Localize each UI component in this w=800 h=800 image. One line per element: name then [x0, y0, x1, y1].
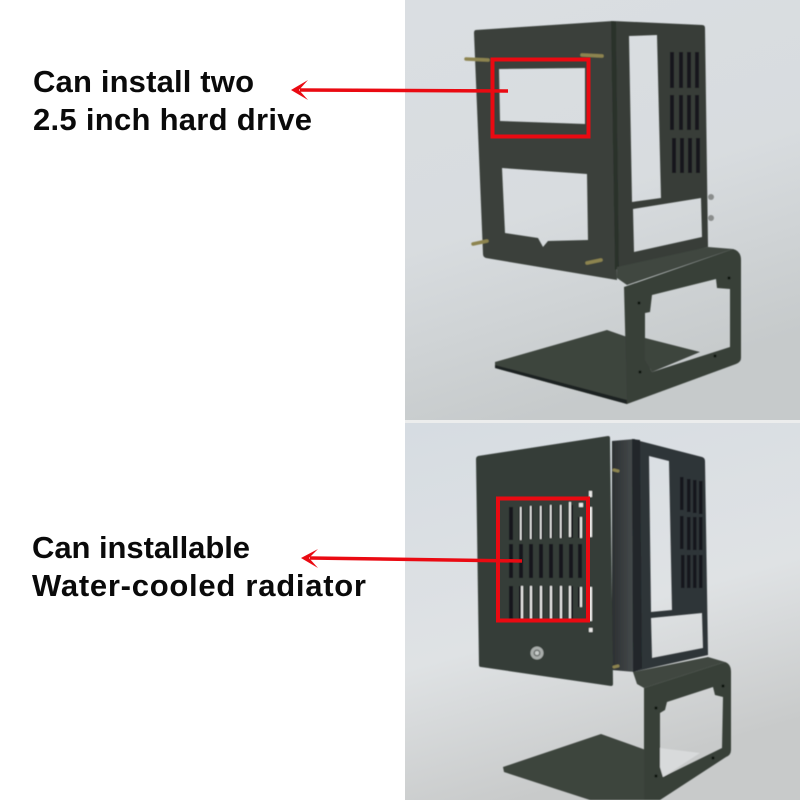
- standoffs between panel and frame: [614, 470, 618, 667]
- callout: hard drive: 2.5 inch hard drive: [33, 102, 312, 137]
- frame box: [612, 439, 708, 672]
- side panel: [476, 436, 613, 686]
- arrow: radiator: [301, 549, 522, 568]
- slots: bottom row: [509, 586, 582, 619]
- arrow: hard drive: [291, 80, 508, 100]
- vent slots, right face: [670, 52, 700, 173]
- red box: radiator area: [498, 498, 588, 620]
- slots: middle row: [509, 544, 582, 578]
- base plate: [503, 734, 660, 800]
- red box: hard drive area: [492, 60, 588, 136]
- PSU stand: [617, 247, 741, 404]
- vent slots, frame: [680, 477, 702, 588]
- callout: radiator: [32, 530, 366, 603]
- slots: top row: [509, 505, 582, 540]
- callout: radiator: Can installable: [32, 530, 250, 565]
- callout: hard drive: [33, 64, 312, 137]
- bolts on right side: [708, 194, 714, 221]
- photo: open-frame case, side panel view: [405, 420, 800, 800]
- standoffs: [466, 55, 602, 263]
- PSU stand: [633, 657, 731, 800]
- base plate: [495, 330, 650, 404]
- icon: power button: [530, 646, 544, 660]
- photo: open-frame case, front view: [405, 0, 800, 421]
- callout: radiator: Water-cooled radiator: [32, 568, 366, 603]
- right face: [611, 21, 708, 270]
- front face: [474, 21, 617, 280]
- callout: hard drive: Can install two: [33, 64, 254, 99]
